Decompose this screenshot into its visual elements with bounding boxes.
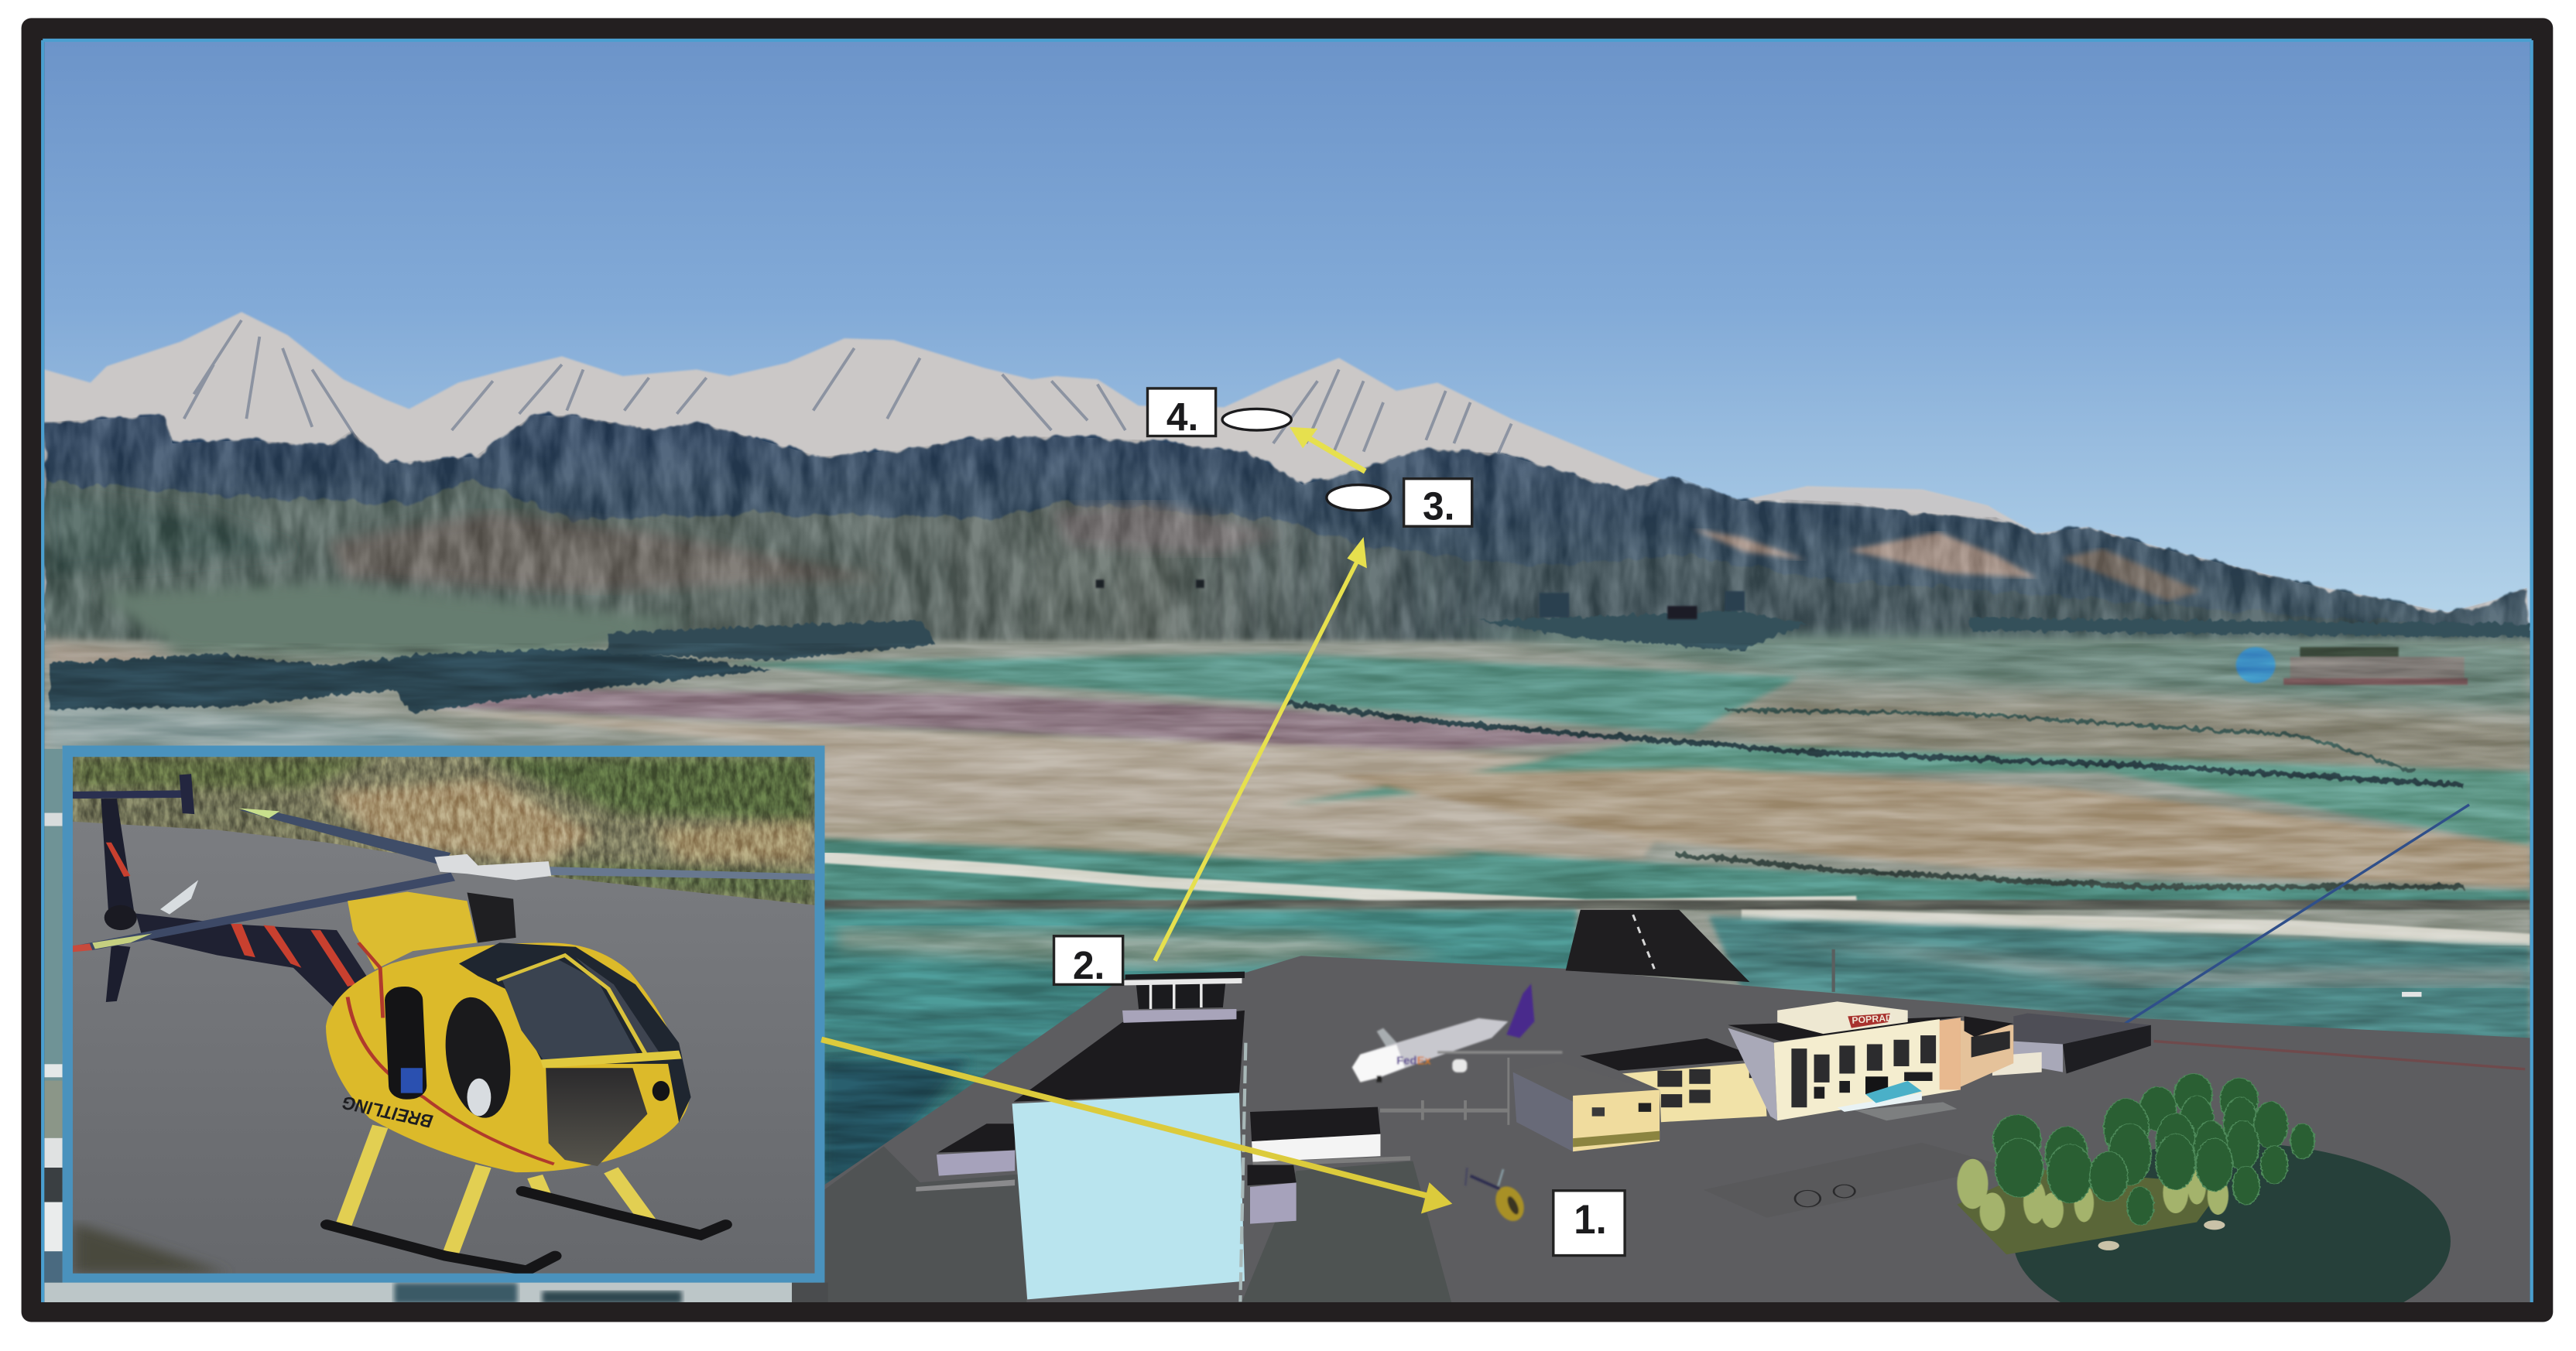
red line [2154, 1041, 2525, 1069]
red stripe [348, 997, 554, 1164]
tower roof [1014, 1011, 1245, 1102]
inset: yellow helicopter photo [63, 746, 824, 1283]
small yellow helicopter on apron [1465, 1168, 1530, 1226]
apron parking outline [1704, 1143, 2006, 1218]
dark green round pond [2013, 1143, 2451, 1339]
small annex [1992, 1052, 2042, 1076]
dark apron patch left of tower [823, 1146, 1027, 1305]
hangar [2013, 1014, 2151, 1073]
label 4 [1148, 388, 1216, 439]
purple tail [1506, 983, 1534, 1038]
label 3 [1404, 479, 1472, 528]
tower edge dashes [1240, 1043, 1245, 1301]
hillside tones [73, 757, 815, 905]
label 2 [1054, 936, 1123, 987]
inset blue border [63, 746, 824, 1283]
strip left of inset [44, 749, 63, 1283]
label 2: 2. [1073, 943, 1105, 987]
green tree crowns [1993, 1073, 2314, 1225]
main building front [1728, 1018, 1961, 1120]
end block [1513, 1062, 1660, 1151]
main building roof [1728, 1016, 1965, 1041]
tree cluster [1957, 1073, 2314, 1250]
skids [327, 1191, 725, 1271]
marker ellipse 4 [1222, 409, 1291, 430]
tower cab glass [1122, 972, 1245, 1009]
mast [1832, 949, 1835, 992]
dark apron patch under tower [1240, 1161, 1452, 1305]
far buildings and blue marker [2236, 647, 2468, 685]
breitling lettering: BREITLING [338, 1093, 436, 1132]
roof sign lettering: POPRAD [1852, 1012, 1893, 1026]
red roof sign [1848, 1014, 1890, 1028]
rotor head [434, 854, 551, 880]
fuselage [326, 942, 690, 1172]
marker ellipse 3 [1327, 485, 1391, 511]
asphalt [73, 822, 815, 1274]
sky [41, 39, 2533, 631]
right wing and engine [1437, 1051, 1562, 1054]
parked cars [1838, 1093, 1922, 1112]
penthouse [1777, 1001, 1908, 1034]
apron fence posts [1380, 1058, 1509, 1125]
hillside [73, 757, 815, 966]
pale lower trees [1957, 1159, 2228, 1231]
small white field marker [2402, 992, 2421, 997]
chin window [546, 1068, 647, 1166]
light blue tower facade [1012, 1093, 1245, 1299]
inset photo [73, 757, 815, 1274]
yellow arrow: point 3 to point 4 [1290, 427, 1365, 471]
east wing [1961, 1016, 2013, 1087]
yellow arrow: tower to point 3 [1155, 537, 1367, 961]
yellow arrow: inset to helicopter [821, 1039, 1452, 1213]
grass under trees [1957, 1169, 2225, 1254]
west wing [1580, 1038, 1767, 1122]
mountain range [44, 312, 2530, 657]
tail rotor assembly [73, 774, 198, 1002]
canopy [459, 942, 691, 1122]
blue line [2112, 805, 2469, 1031]
planters [2098, 1196, 2255, 1250]
ridge streaks [184, 320, 1512, 453]
rotor blades [73, 809, 815, 952]
grey apron [823, 956, 2530, 1305]
label 4: 4. [1166, 395, 1198, 439]
dark clumps on the foothills [1096, 580, 1745, 619]
roadside grass [73, 1223, 228, 1274]
door window [438, 995, 518, 1120]
label 1: 1. [1574, 1197, 1607, 1243]
lower fields [821, 910, 2530, 1199]
pink scree patches [1692, 528, 1807, 560]
fedex logo: FedEx [1396, 1055, 1431, 1067]
strip under inset [41, 1283, 828, 1305]
valley fields [41, 583, 2533, 1314]
mast [467, 893, 516, 942]
forest strip [50, 580, 2530, 887]
runway threshold [1566, 910, 1749, 982]
dark forested flank [44, 416, 2530, 657]
tower cab base [1122, 1009, 1236, 1023]
label 1 [1553, 1191, 1625, 1256]
tail boom [135, 914, 369, 1007]
terminal complex [1513, 1001, 2451, 1339]
skid legs [342, 1127, 649, 1256]
foothills [44, 478, 1479, 642]
airplane [1352, 983, 1562, 1083]
small annex [1247, 1165, 1297, 1224]
control tower building [916, 972, 1410, 1301]
second snow ridge [1746, 496, 2008, 523]
runway road strips [821, 857, 2530, 941]
left wing [916, 1124, 1015, 1192]
bicycles [1795, 1185, 1855, 1207]
rear window [384, 986, 427, 1100]
hillside texture [73, 757, 815, 907]
field texture [44, 644, 2530, 1202]
round vent [653, 1081, 670, 1101]
right wing [1250, 1107, 1410, 1166]
fuselage [1352, 1018, 1508, 1083]
mountain texture [44, 411, 2530, 648]
engine cowling [348, 891, 477, 970]
entrance forecourt [1855, 1102, 1957, 1120]
nose [1352, 1045, 1405, 1083]
wing [1377, 1028, 1401, 1052]
label 3: 3. [1423, 484, 1454, 528]
